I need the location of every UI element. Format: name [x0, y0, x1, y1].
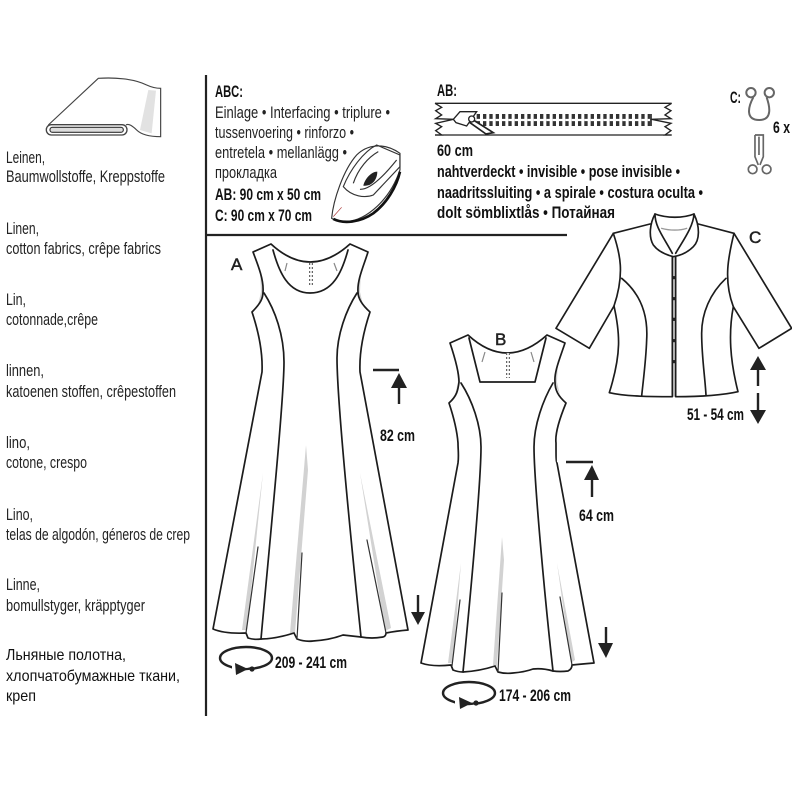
- icon: hook: [746, 88, 774, 120]
- label: 209 - 241 cm: 209 - 241 cm: [275, 654, 347, 672]
- icon: eye: [748, 135, 771, 174]
- text: interfacing: [215, 83, 390, 225]
- text: zipper: naadritssluiting • a spirale • costura oculta •: [437, 184, 703, 202]
- text: interfacing: ABC:: [215, 83, 243, 101]
- text: fabric recommendations: cotone, crespo: [6, 454, 87, 472]
- garment C: jacket: [556, 214, 792, 397]
- text: fabric recommendations: Lino,: [6, 506, 33, 524]
- text: fabric recommendations: Льняные полотна,: [6, 647, 126, 664]
- text: fabric recommendations: хлопчатобумажные ткани,: [6, 668, 180, 685]
- label: 51 - 54 cm: 51 - 54 cm: [687, 406, 744, 424]
- text: fabric recommendations: katoenen stoffen, crêpestoffen: [6, 383, 176, 401]
- text: zipper: 60 cm: [437, 142, 473, 160]
- text: interfacing: entretela • mellanlägg •: [215, 144, 347, 162]
- label: C: C: [749, 228, 761, 247]
- text: fabric recommendations: [6, 149, 190, 705]
- text: zipper: nahtverdeckt • invisible • pose invisible •: [437, 163, 680, 181]
- text: fabric recommendations: telas de algodón, géneros de crep: [6, 526, 190, 544]
- arrow: C length double arrow: [750, 356, 766, 424]
- arrow: B downward hem mark: [598, 627, 613, 658]
- arrow: B upward length mark: [566, 462, 599, 497]
- text: interfacing: прокладка: [215, 164, 278, 182]
- label: B: B: [495, 330, 506, 349]
- icon: A hem circumference loop: [220, 647, 272, 675]
- label: A: A: [231, 255, 243, 274]
- text: interfacing: C: 90 cm x 70 cm: [215, 207, 312, 225]
- text: zipper: [437, 82, 703, 222]
- label: 174 - 206 cm: 174 - 206 cm: [499, 687, 571, 705]
- arrow: A downward hem mark: [411, 595, 425, 625]
- label: hook quantity C: C:: [730, 89, 741, 107]
- text: fabric recommendations: lino,: [6, 434, 30, 452]
- text: fabric recommendations: cotonnade,crêpe: [6, 311, 98, 329]
- text: interfacing: AB: 90 cm x 50 cm: [215, 186, 321, 204]
- icon: folded fabric: [46, 78, 161, 137]
- icon: zipper: [435, 103, 672, 135]
- text: fabric recommendations: linnen,: [6, 362, 44, 380]
- text: fabric recommendations: Linne,: [6, 576, 40, 594]
- divider lines: [206, 75, 567, 716]
- text: fabric recommendations: Baumwollstoffe, Kreppstoffe: [6, 168, 165, 186]
- text: fabric recommendations: Lin,: [6, 291, 26, 309]
- text: fabric recommendations: bomullstyger, kräpptyger: [6, 597, 145, 615]
- icon: iron: [332, 145, 400, 222]
- text: zipper: dolt sömblixtlås • Потайная: [437, 204, 615, 222]
- arrow: A upward length mark: [373, 370, 407, 404]
- text: interfacing: tussenvoering • rinforzo •: [215, 124, 354, 142]
- text: fabric recommendations: креп: [6, 688, 36, 705]
- text: fabric recommendations: Leinen,: [6, 149, 45, 167]
- text: fabric recommendations: cotton fabrics, crêpe fabrics: [6, 240, 161, 258]
- label: 82 cm: 82 cm: [380, 427, 415, 445]
- garment A: dress: [213, 244, 408, 641]
- text: interfacing: Einlage • Interfacing • triplure •: [215, 104, 390, 122]
- text: zipper: AB:: [437, 82, 457, 100]
- text: fabric recommendations: Linen,: [6, 220, 39, 238]
- garment B: dress: [421, 335, 594, 673]
- label: 64 cm: 64 cm: [579, 507, 614, 525]
- icon: B hem circumference loop: [443, 682, 495, 709]
